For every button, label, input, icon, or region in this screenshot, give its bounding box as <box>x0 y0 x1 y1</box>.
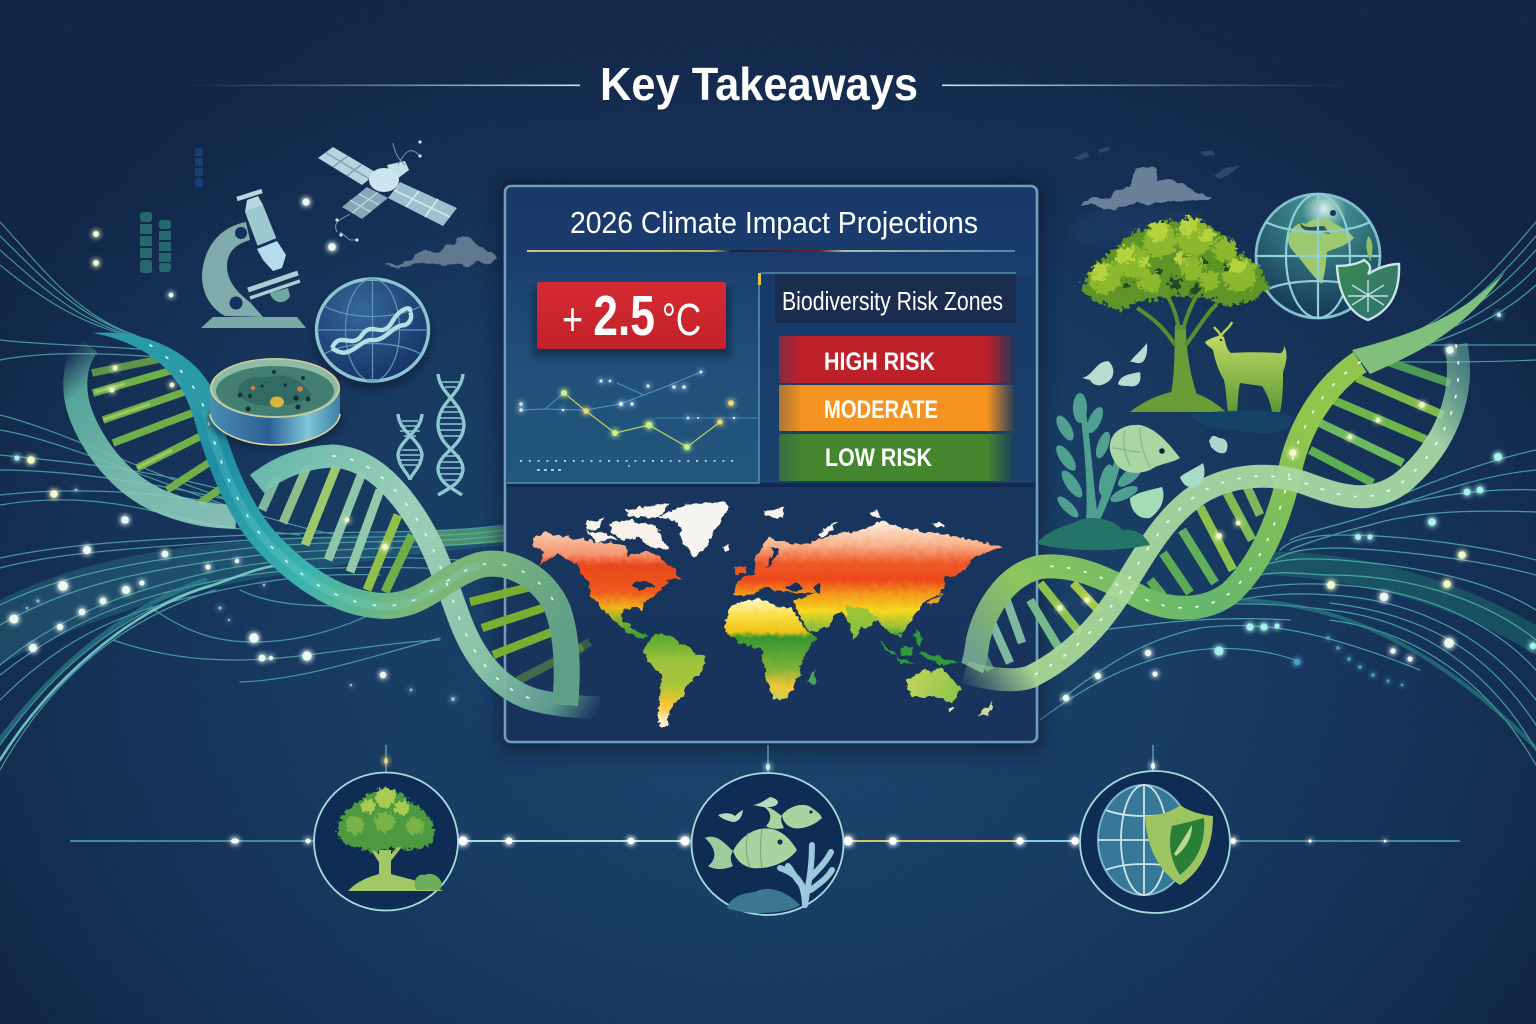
DNA helix: left <box>75 332 600 708</box>
legend: high risk <box>779 336 1015 383</box>
legend: low risk <box>779 434 1015 481</box>
legend: moderate: MODERATE <box>824 396 938 424</box>
line chart <box>519 370 758 470</box>
biodiversity risk zones header <box>761 273 1016 323</box>
rungs: right lower section <box>972 583 1100 670</box>
strand: light crossing <box>257 456 600 708</box>
icon: small DNA helices <box>398 374 464 495</box>
rungs: left lower section <box>470 587 590 682</box>
light dots: glowing nodes on flows <box>10 198 1536 701</box>
continent: australia <box>906 666 961 703</box>
icon: deer <box>1205 322 1287 412</box>
callout: temperature +2.5°C: + <box>562 294 583 345</box>
DNA helix: right <box>965 272 1505 680</box>
strand: teal taper <box>92 332 219 414</box>
icon: satellite <box>318 140 457 242</box>
timeline <box>70 745 1460 846</box>
icon: cloud right <box>1070 165 1212 245</box>
continent: africa <box>725 598 816 700</box>
timeline node: fish and coral <box>692 773 844 915</box>
legend: moderate <box>779 385 1015 431</box>
strand: pale main <box>965 345 1458 680</box>
islands: asia pacific <box>880 628 958 665</box>
rungs: left upper section <box>92 357 223 503</box>
panel: 2026 climate impact projections <box>497 178 1045 754</box>
world map <box>531 502 1002 727</box>
continent: greenland <box>660 502 730 557</box>
icon: creature <box>1110 425 1180 473</box>
flow lines: left <box>0 222 505 770</box>
title: Key Takeaways <box>600 58 918 110</box>
callout: temperature +2.5°C: 2.5 <box>593 284 655 347</box>
timeline node: globe and shield <box>1080 771 1230 913</box>
icon: leaves <box>1082 343 1228 518</box>
callout: temperature +2.5°C <box>533 282 730 356</box>
icon: microscope <box>201 191 306 328</box>
icon: seabed mound <box>1037 518 1150 550</box>
strand: left arc <box>75 345 236 517</box>
callout: temperature +2.5°C: °C <box>662 294 701 345</box>
legend: low risk: LOW RISK <box>825 444 932 472</box>
continent: south america <box>644 633 706 727</box>
icon: large tree <box>1082 217 1268 412</box>
strand: teal main <box>205 410 567 705</box>
rungs: right middle section <box>1150 487 1260 596</box>
seas <box>632 546 821 594</box>
continent: north america <box>531 533 681 640</box>
icon: mound under deer <box>1190 410 1292 433</box>
strand: right taper <box>1352 272 1505 374</box>
legend: high risk: HIGH RISK <box>824 348 935 376</box>
strand: green main <box>972 362 1360 668</box>
biodiversity risk zones header: Biodiversity Risk Zones <box>782 288 1003 316</box>
flow lines: right <box>1040 222 1536 765</box>
icon: petri dish <box>207 358 343 448</box>
continent: eurasia <box>734 520 1002 640</box>
icon: coral <box>1052 393 1145 522</box>
icon: globe with DNA <box>314 279 432 390</box>
rungs: left middle section <box>262 465 412 592</box>
arctic islands <box>586 503 669 550</box>
icon: globe with shield <box>1256 194 1399 320</box>
timeline node: tree <box>314 772 458 910</box>
icon: distant clouds <box>1073 147 1240 179</box>
icon: cloud left <box>385 237 497 267</box>
icon: data bars <box>140 148 203 273</box>
panel top zone <box>507 188 1035 483</box>
rungs: right upper section <box>1310 360 1450 483</box>
panel heading: 2026 Climate Impact Projections <box>570 205 978 240</box>
